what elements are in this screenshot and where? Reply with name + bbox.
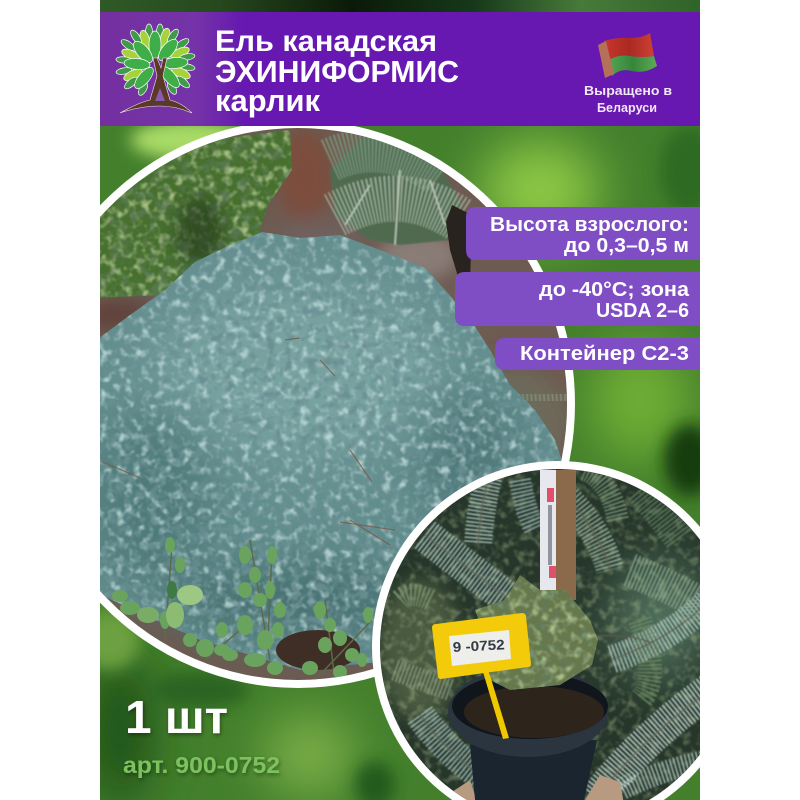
- logo: tree: [116, 24, 195, 113]
- title: Ель канадская: [215, 25, 437, 58]
- title: [215, 25, 459, 118]
- small photo: potted plant: [370, 460, 710, 800]
- small photo ring: [372, 461, 700, 800]
- panel: hardiness: [455, 272, 700, 326]
- blue spruce dome: [90, 232, 565, 670]
- fir branches: [395, 470, 710, 800]
- grown in Belarus label: [584, 86, 672, 114]
- title: ЭХИНИФОРМИС: [215, 54, 459, 89]
- article number: арт. 900-0752: [123, 752, 280, 778]
- bottom shrub with leaves: [112, 537, 373, 680]
- panel: hardiness: USDA 2–6: [596, 300, 689, 322]
- panel: height: до 0,3–0,5 м: [564, 235, 689, 257]
- panel: container: Контейнер С2-3: [520, 343, 689, 365]
- panel: height: Высота взрослого:: [490, 214, 689, 236]
- green blurred background: [80, 0, 720, 800]
- infographic: [100, 0, 700, 800]
- quantity: 1 шт: [125, 691, 228, 743]
- back green bush: [90, 130, 292, 298]
- yellow plant label: [432, 613, 531, 739]
- large photo: dwarf spruce bush: [100, 128, 567, 680]
- header band: [100, 12, 700, 126]
- large photo ring: [100, 126, 575, 688]
- pine needles, upper right: [330, 135, 462, 245]
- sand ground: [440, 775, 625, 800]
- dark trunk: [446, 205, 471, 274]
- small plant: [475, 575, 598, 690]
- mulch patches: [85, 130, 570, 470]
- flag of Belarus: [598, 33, 657, 78]
- yellow plant label: 9 -0752: [452, 636, 505, 655]
- grown in Belarus label: Беларуси: [597, 100, 657, 115]
- panel: height: [466, 207, 700, 260]
- panel: container: [495, 338, 700, 370]
- right side pine: [510, 395, 580, 400]
- grown in Belarus label: Выращено в: [584, 83, 672, 98]
- pot: [448, 667, 608, 800]
- soil under leaves: [276, 630, 360, 670]
- title: карлик: [215, 83, 320, 118]
- panel: hardiness: до -40°C; зона: [539, 279, 690, 301]
- measuring stake: [540, 470, 576, 600]
